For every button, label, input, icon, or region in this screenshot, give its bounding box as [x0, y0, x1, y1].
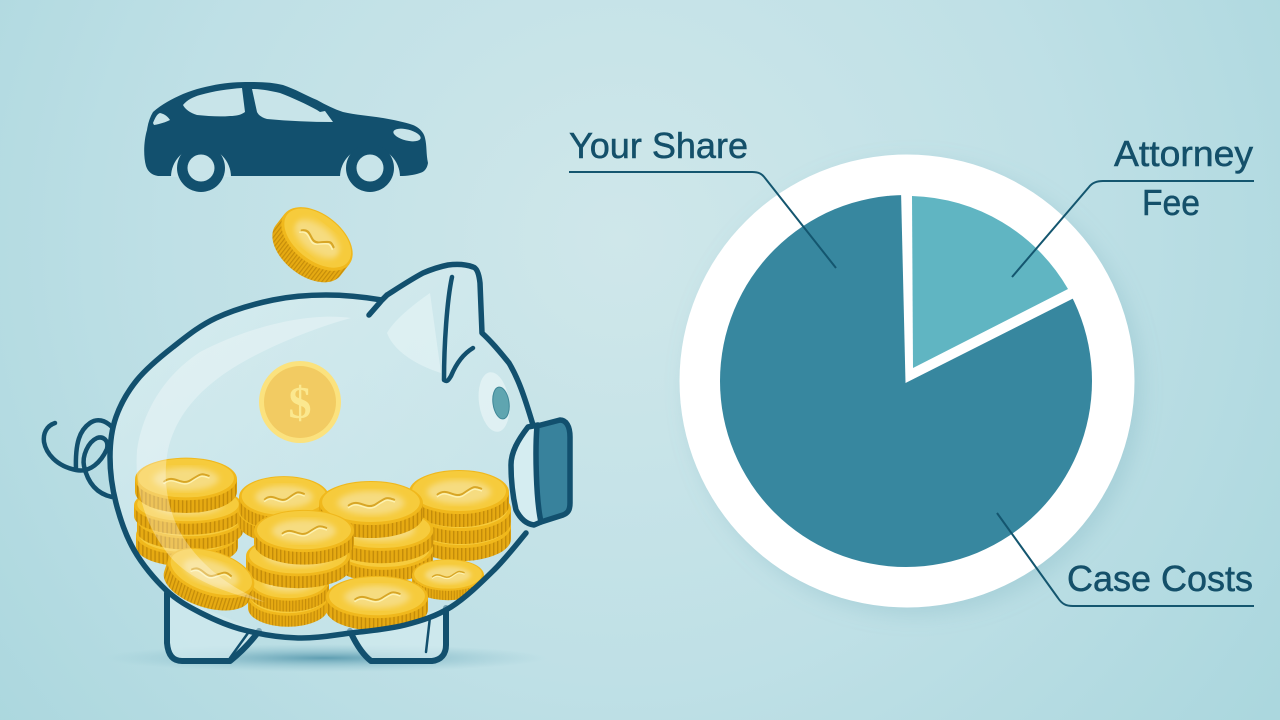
pig inner ear [444, 277, 473, 381]
piggy bank shadow [103, 644, 547, 672]
floating dollar coin [259, 361, 341, 443]
icon: car [144, 82, 428, 192]
glass reflection [137, 317, 351, 602]
leader line: case costs [997, 513, 1254, 606]
car front wheel [340, 144, 400, 192]
panel: pie chart [680, 154, 1142, 615]
car rear window [183, 88, 245, 116]
pig glass body [110, 264, 533, 638]
label: your share [569, 125, 836, 268]
label: attorney fee: Attorney [1114, 133, 1253, 174]
second coin stack [238, 476, 329, 543]
pig legs [167, 593, 446, 661]
label: attorney fee [1012, 133, 1254, 277]
leader line: attorney fee [1012, 181, 1254, 277]
pig eye [475, 370, 513, 434]
pig snout [511, 420, 570, 525]
right coin stack [409, 470, 511, 561]
pie white ring [680, 154, 1134, 608]
leader line: your share [569, 172, 836, 268]
tilted coin [164, 548, 254, 610]
floating dollar coin: $ [288, 377, 312, 428]
small coin at bottom right [412, 559, 484, 600]
front coin [326, 576, 428, 631]
left coin stack [134, 458, 243, 566]
car front window [252, 89, 333, 122]
front coin stack [246, 510, 354, 627]
label: case costs [997, 513, 1254, 606]
icon: piggy bank [44, 264, 570, 661]
label: your share: Your Share [569, 125, 748, 166]
car rear wheel [171, 144, 231, 192]
pie slice: attorney fee [912, 196, 1068, 368]
pie slice: your share and case costs [720, 195, 1092, 567]
pig curly tail [44, 420, 112, 497]
ear highlight [387, 293, 441, 373]
pie shadow [686, 161, 1142, 615]
pie slice gap [901, 190, 1076, 383]
label: case costs: Case Costs [1067, 558, 1253, 599]
label: attorney fee: Fee [1142, 182, 1200, 223]
pig outline [110, 264, 533, 638]
car tail light [153, 113, 170, 125]
icon: falling coin [261, 194, 364, 295]
car headlight [392, 126, 422, 144]
centre-right coin stack [319, 481, 434, 582]
coin pile [134, 458, 511, 631]
